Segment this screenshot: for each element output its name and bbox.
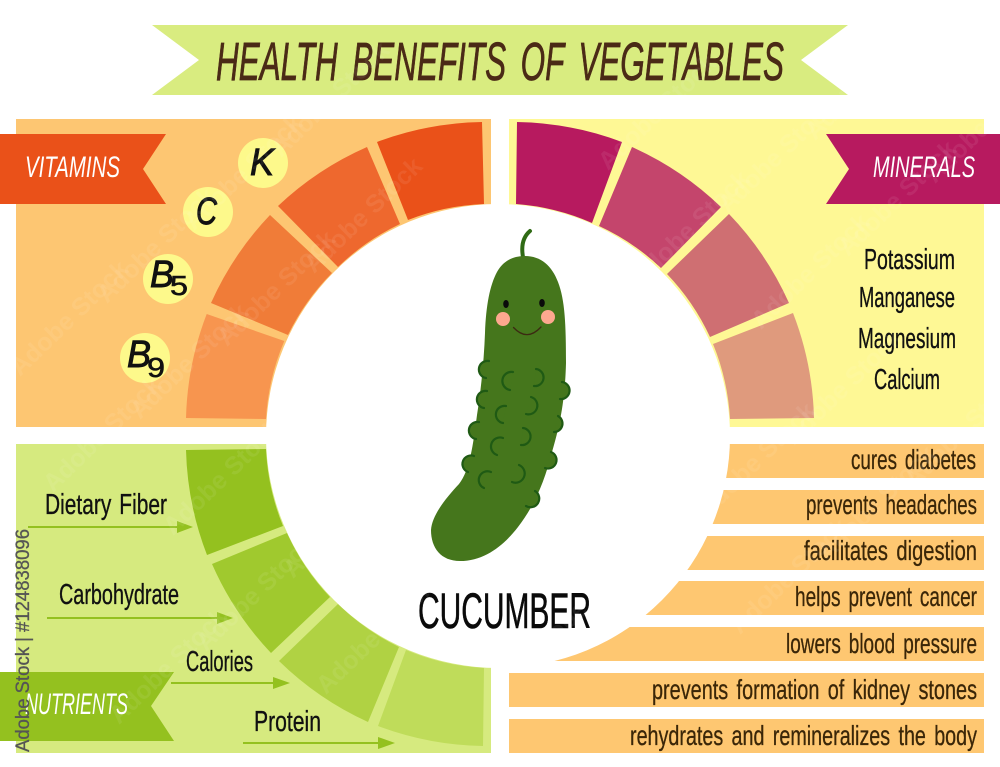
stock watermark: Adobe Stock <box>626 165 755 291</box>
arrow: carbohydrate <box>47 612 233 624</box>
title banner <box>152 25 848 95</box>
cucumber face <box>496 299 555 335</box>
stock watermark: Adobe Stock <box>38 371 167 497</box>
vitamin B9 badge <box>120 333 170 383</box>
cucumber stem <box>522 231 530 257</box>
arrow: calories <box>171 677 290 689</box>
panel: minerals <box>509 119 1000 427</box>
stock watermark: Adobe Stock <box>266 36 395 162</box>
stock watermark: Adobe Stock <box>713 92 842 218</box>
stock watermark: Adobe Stock <box>518 543 647 669</box>
cucumber bumps <box>462 361 570 507</box>
benefit bars <box>509 444 984 753</box>
minerals ribbon <box>826 134 1000 204</box>
vitamins ribbon <box>0 134 166 204</box>
stock id vertical text: Adobe Stock | #124838096 <box>13 529 34 752</box>
stock watermark: Adobe Stock <box>179 109 308 235</box>
minerals list <box>858 244 956 396</box>
label: dietary fiber: Dietary Fiber <box>45 489 167 521</box>
vitamin C badge <box>183 187 233 237</box>
label: carbohydrate: Carbohydrate <box>59 579 179 611</box>
label: calories: Calories <box>186 646 253 678</box>
stock watermark: Adobe Stock <box>779 324 908 450</box>
stock watermark: Adobe Stock <box>158 414 287 540</box>
stock watermark: Adobe Stock <box>92 182 221 308</box>
stock watermark: Adobe Stock <box>299 152 428 278</box>
vitamins ribbon: VITAMINS <box>25 151 120 184</box>
benefits text <box>630 444 977 751</box>
cucumber name: CUCUMBER <box>418 583 591 639</box>
vitamin B9 badge: 9 <box>147 352 165 383</box>
stock watermark: Adobe Stock <box>812 440 941 566</box>
arrow: dietary fiber <box>28 521 193 533</box>
stock watermark: Adobe Stock <box>692 397 821 523</box>
panel: vitamins <box>0 119 491 427</box>
stock watermark: Adobe Stock <box>5 255 134 381</box>
stock watermark: Adobe Stock <box>278 457 407 583</box>
stock watermark: Adobe Stock <box>125 298 254 424</box>
stock watermark: Adobe Stock <box>311 573 440 699</box>
cucumber body <box>431 256 566 561</box>
vitamin B5 badge: 5 <box>170 270 188 301</box>
vitamin B5 badge: B <box>150 254 174 296</box>
panel: nutrients <box>0 444 491 753</box>
stock watermark: Adobe Stock <box>746 208 875 334</box>
central white circle <box>266 204 730 668</box>
vitamin K badge <box>238 138 288 188</box>
vitamin C badge: C <box>196 191 217 233</box>
minerals list: Potassium <box>864 244 955 276</box>
nutrients arc segments <box>186 449 484 746</box>
minerals arc segments <box>516 122 814 419</box>
label: protein: Protein <box>254 706 321 738</box>
vitamin B9 badge: B <box>127 334 151 376</box>
minerals list: Calcium <box>874 364 940 396</box>
stock watermark: Adobe Stock <box>212 225 341 351</box>
stock watermark: Adobe Stock <box>725 513 854 639</box>
arrow: protein <box>243 737 395 749</box>
stock watermark: Adobe Stock <box>800 19 929 145</box>
stock watermark: Adobe Stock <box>593 49 722 175</box>
nutrients ribbon: NUTRIENTS <box>25 688 128 721</box>
vitamins arc segments <box>186 122 484 419</box>
stock watermark: Adobe Stock <box>833 135 962 261</box>
vitamin B5 badge <box>143 254 193 304</box>
icon: cucumber character <box>431 231 570 561</box>
stock watermark: Adobe Stock <box>104 603 233 729</box>
vitamin K badge: K <box>250 142 276 184</box>
nutrients ribbon <box>0 672 174 741</box>
stock watermark: Adobe Stock <box>191 530 320 656</box>
